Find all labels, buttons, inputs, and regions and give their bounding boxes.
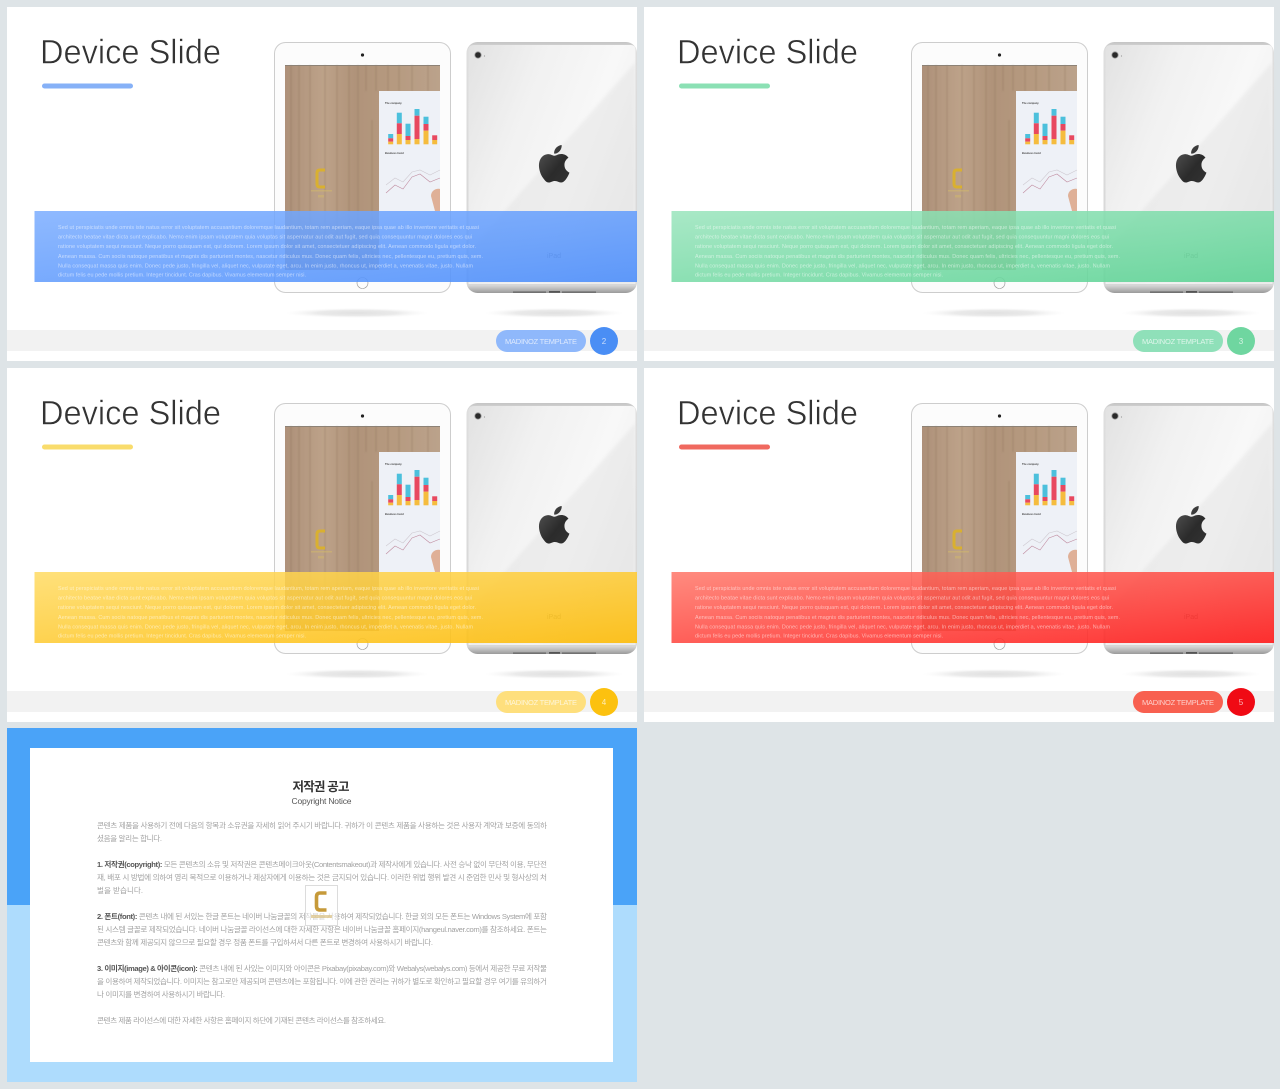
copyright heading: 저작권 공고 (292, 779, 350, 794)
footer pill: MADINOZ TEMPLATE (1142, 337, 1214, 346)
footer pill (1133, 691, 1223, 713)
panel: copyright notice slide (7, 728, 637, 1082)
panel: blue device slide (7, 7, 637, 361)
device shadows (285, 669, 624, 679)
page number: 4 (602, 698, 607, 707)
section: image and icon (97, 963, 547, 999)
device: tablet back (1104, 42, 1274, 293)
text band (672, 572, 1274, 643)
text band: Nulla consequat massa quis enim. Donec pede justo, fringilla vel, aliquet nec, vulputate eget, arcu. In enim justo, rhoncus ut, imperdiet a, venenatis vitae, justo. Nullam (695, 264, 1111, 270)
device: tablet back (466, 403, 637, 654)
license note: 콘텐츠 제품 라이선스에 대한 자세한 사항은 홈페이지 하단에 기재된 콘텐츠 라이선스를 참조하세요. (97, 1015, 386, 1025)
footer pill: MADINOZ TEMPLATE (505, 698, 577, 707)
device shadows (922, 308, 1261, 318)
text band: Aenean massa. Cum sociis natoque penatibus et magnis dis parturient montes, nascetur ridiculus mus. Donec quam felis, ultricies nec, pellentesque eu, pretium quis, sem. (695, 615, 1120, 621)
text band: dictum felis eu pede mollis pretium. Integer tincidunt. Cras dapibus. Vivamus elementum semper nisi. (695, 634, 943, 640)
section: font (97, 911, 547, 947)
title underline (679, 444, 770, 450)
text band: Aenean massa. Cum sociis natoque penatibus et magnis dis parturient montes, nascetur ridiculus mus. Donec quam felis, ultricies nec, pellentesque eu, pretium quis, sem. (695, 254, 1120, 260)
text band: dictum felis eu pede mollis pretium. Integer tincidunt. Cras dapibus. Vivamus elementum semper nisi. (58, 272, 306, 278)
device shadows (922, 669, 1261, 679)
text band: ratione voluptatem sequi nesciunt. Neque porro quisquam est, qui dolorem. Lorem ipsum dolor sit amet, consectetuer adipiscing elit. Aenean commodo ligula eget dolor. (695, 244, 1113, 250)
intro paragraph: 콘텐츠 제품을 사용하기 전에 다음의 항목과 소유권을 자세히 읽어 주시기 바랍니다. 귀하가 이 콘텐츠 제품을 사용하는 것은 사용자 계약과 보증에 동의하 (97, 820, 547, 830)
footer pill: MADINOZ TEMPLATE (1142, 698, 1214, 707)
text band: Sed ut perspiciatis unde omnis iste natus error sit voluptatem accusantium doloremque laudantium, totam rem aperiam, eaque ipsa quae ab illo inventore veritatis et quasi (695, 225, 1116, 231)
text band: Nulla consequat massa quis enim. Donec pede justo, fringilla vel, aliquet nec, vulputate eget, arcu. In enim justo, rhoncus ut, imperdiet a, venenatis vitae, justo. Nullam (695, 624, 1111, 630)
page number (1227, 327, 1255, 355)
title underline (42, 444, 133, 450)
text band: ratione voluptatem sequi nesciunt. Neque porro quisquam est, qui dolorem. Lorem ipsum dolor sit amet, consectetuer adipiscing elit. Aenean commodo ligula eget dolor. (695, 605, 1113, 611)
slide title: Device Slide (677, 34, 858, 72)
slide title: Device Slide (40, 34, 221, 72)
page number (590, 688, 618, 716)
device shadows (285, 308, 624, 318)
text band (672, 211, 1274, 282)
device: tablet front (912, 404, 1088, 654)
page number: 2 (602, 337, 607, 346)
panel: yellow device slide (7, 368, 637, 722)
text band: Aenean massa. Cum sociis natoque penatibus et magnis dis parturient montes, nascetur ridiculus mus. Donec quam felis, ultricies nec, pellentesque eu, pretium quis, sem. (58, 254, 483, 260)
text band: architecto beatae vitae dicta sunt explicabo. Nemo enim ipsam voluptatem quia voluptas sit aspernatur aut odit aut fugit, sed quia consequuntur magni dolores eos qui (695, 596, 1109, 602)
text band: dictum felis eu pede mollis pretium. Integer tincidunt. Cras dapibus. Vivamus elementum semper nisi. (58, 634, 306, 640)
logo watermark (306, 886, 338, 926)
text band: Sed ut perspiciatis unde omnis iste natus error sit voluptatem accusantium doloremque laudantium, totam rem aperiam, eaque ipsa quae ab illo inventore veritatis et quasi (695, 586, 1116, 592)
section: image and icon: 3. 이미지(image) & 아이콘(icon): 콘텐츠 내에 된 사있는 이미지와 아이콘은 Pixabay(pixabay.com)와 Webalys(webalys.com) 등에서 제공한 무료 저작물 (97, 963, 547, 973)
footer strip (7, 330, 637, 351)
slide title: Device Slide (677, 394, 858, 432)
device: tablet front (912, 42, 1088, 292)
text band: Sed ut perspiciatis unde omnis iste natus error sit voluptatem accusantium doloremque laudantium, totam rem aperiam, eaque ipsa quae ab illo inventore veritatis et quasi (58, 586, 479, 592)
section: copyright: 벌을 받습니다. (97, 885, 143, 895)
section: image and icon: 나 이미지를 변경하여 사용하시기 바랍니다. (97, 989, 225, 999)
title underline (679, 84, 770, 88)
footer strip (644, 691, 1274, 712)
section: copyright: 재, 배포 시 방법에 의하여 영리 목적으로 이용하거나 제삼자에게 이용하는 것은 금지되어 있습니다. 이러한 위법 행위 발견 시 준엄한 민사 및 형사상의 처 (97, 872, 547, 882)
text band: ratione voluptatem sequi nesciunt. Neque porro quisquam est, qui dolorem. Lorem ipsum dolor sit amet, consectetuer adipiscing elit. Aenean commodo ligula eget dolor. (58, 244, 476, 250)
section: font: 된 시스템 글꼴로 제작되었습니다. 네이버 나눔글꼴 라이선스에 대한 자세한 사항은 네이버 나눔글꼴 홈페이지(hangeul.naver.com)를 참조하세요. 폰트는 (97, 924, 547, 934)
intro paragraph: 셨음을 알리는 합니다. (97, 833, 162, 843)
text band: Sed ut perspiciatis unde omnis iste natus error sit voluptatem accusantium doloremque laudantium, totam rem aperiam, eaque ipsa quae ab illo inventore veritatis et quasi (58, 225, 479, 231)
device: tablet back (1104, 403, 1274, 654)
page number: 3 (1239, 337, 1244, 346)
page number (590, 327, 618, 355)
footer pill: MADINOZ TEMPLATE (505, 337, 577, 346)
footer pill (496, 330, 586, 352)
device: tablet front (274, 42, 450, 292)
section: font: 2. 폰트(font): 콘텐츠 내에 된 서있는 한글 폰트는 네이버 나눔글꼴의 저작물을 사용하여 제작되었습니다. 한글 외의 모든 폰트는 Windows System에 포함 (97, 911, 547, 921)
panel: green device slide (644, 7, 1274, 361)
text band: Nulla consequat massa quis enim. Donec pede justo, fringilla vel, aliquet nec, vulputate eget, arcu. In enim justo, rhoncus ut, imperdiet a, venenatis vitae, justo. Nullam (58, 264, 474, 270)
text band (34, 211, 637, 282)
section: copyright: 1. 저작권(copyright): 모든 콘텐츠의 소유 및 저작권은 콘텐츠메이크아웃(Contentsmakeout)과 제작사에게 있습니다. 사전 승낙 없이 무단적 이용, 무단전 (97, 859, 547, 869)
page number: 5 (1239, 698, 1244, 707)
footer pill (1133, 330, 1223, 352)
intro paragraph (97, 820, 547, 843)
device: tablet back (466, 42, 637, 293)
text band: Aenean massa. Cum sociis natoque penatibus et magnis dis parturient montes, nascetur ridiculus mus. Donec quam felis, ultricies nec, pellentesque eu, pretium quis, sem. (58, 615, 483, 621)
text band: dictum felis eu pede mollis pretium. Integer tincidunt. Cras dapibus. Vivamus elementum semper nisi. (695, 272, 943, 278)
footer strip (644, 330, 1274, 351)
text band: architecto beatae vitae dicta sunt explicabo. Nemo enim ipsam voluptatem quia voluptas sit aspernatur aut odit aut fugit, sed quia consequuntur magni dolores eos qui (58, 596, 472, 602)
section: copyright (97, 859, 547, 895)
page number (1227, 688, 1255, 716)
section: image and icon: 을 이용하여 제작되었습니다. 이미지는 참고로만 제공되며 콘텐츠에는 포함됩니다. 이에 관한 권리는 귀하가 별도로 확인하고 필요할 경우 여기를 유의하거 (97, 976, 547, 986)
text band: architecto beatae vitae dicta sunt explicabo. Nemo enim ipsam voluptatem quia voluptas sit aspernatur aut odit aut fugit, sed quia consequuntur magni dolores eos qui (695, 234, 1109, 240)
copyright subheading: Copyright Notice (292, 796, 352, 806)
device: tablet front (274, 404, 450, 654)
text band: architecto beatae vitae dicta sunt explicabo. Nemo enim ipsam voluptatem quia voluptas sit aspernatur aut odit aut fugit, sed quia consequuntur magni dolores eos qui (58, 234, 472, 240)
slide title: Device Slide (40, 394, 221, 432)
section: font: 콘텐츠와 함께 제공되지 않으므로 필요할 경우 정품 폰트를 구입하셔서 다른 폰트로 변경하여 사용하시기 바랍니다. (97, 937, 433, 947)
footer pill (496, 691, 586, 713)
panel: red device slide (644, 368, 1274, 722)
text band: Nulla consequat massa quis enim. Donec pede justo, fringilla vel, aliquet nec, vulputate eget, arcu. In enim justo, rhoncus ut, imperdiet a, venenatis vitae, justo. Nullam (58, 624, 474, 630)
footer strip (7, 691, 637, 712)
title underline (42, 84, 133, 88)
text band (34, 572, 637, 643)
text band: ratione voluptatem sequi nesciunt. Neque porro quisquam est, qui dolorem. Lorem ipsum dolor sit amet, consectetuer adipiscing elit. Aenean commodo ligula eget dolor. (58, 605, 476, 611)
